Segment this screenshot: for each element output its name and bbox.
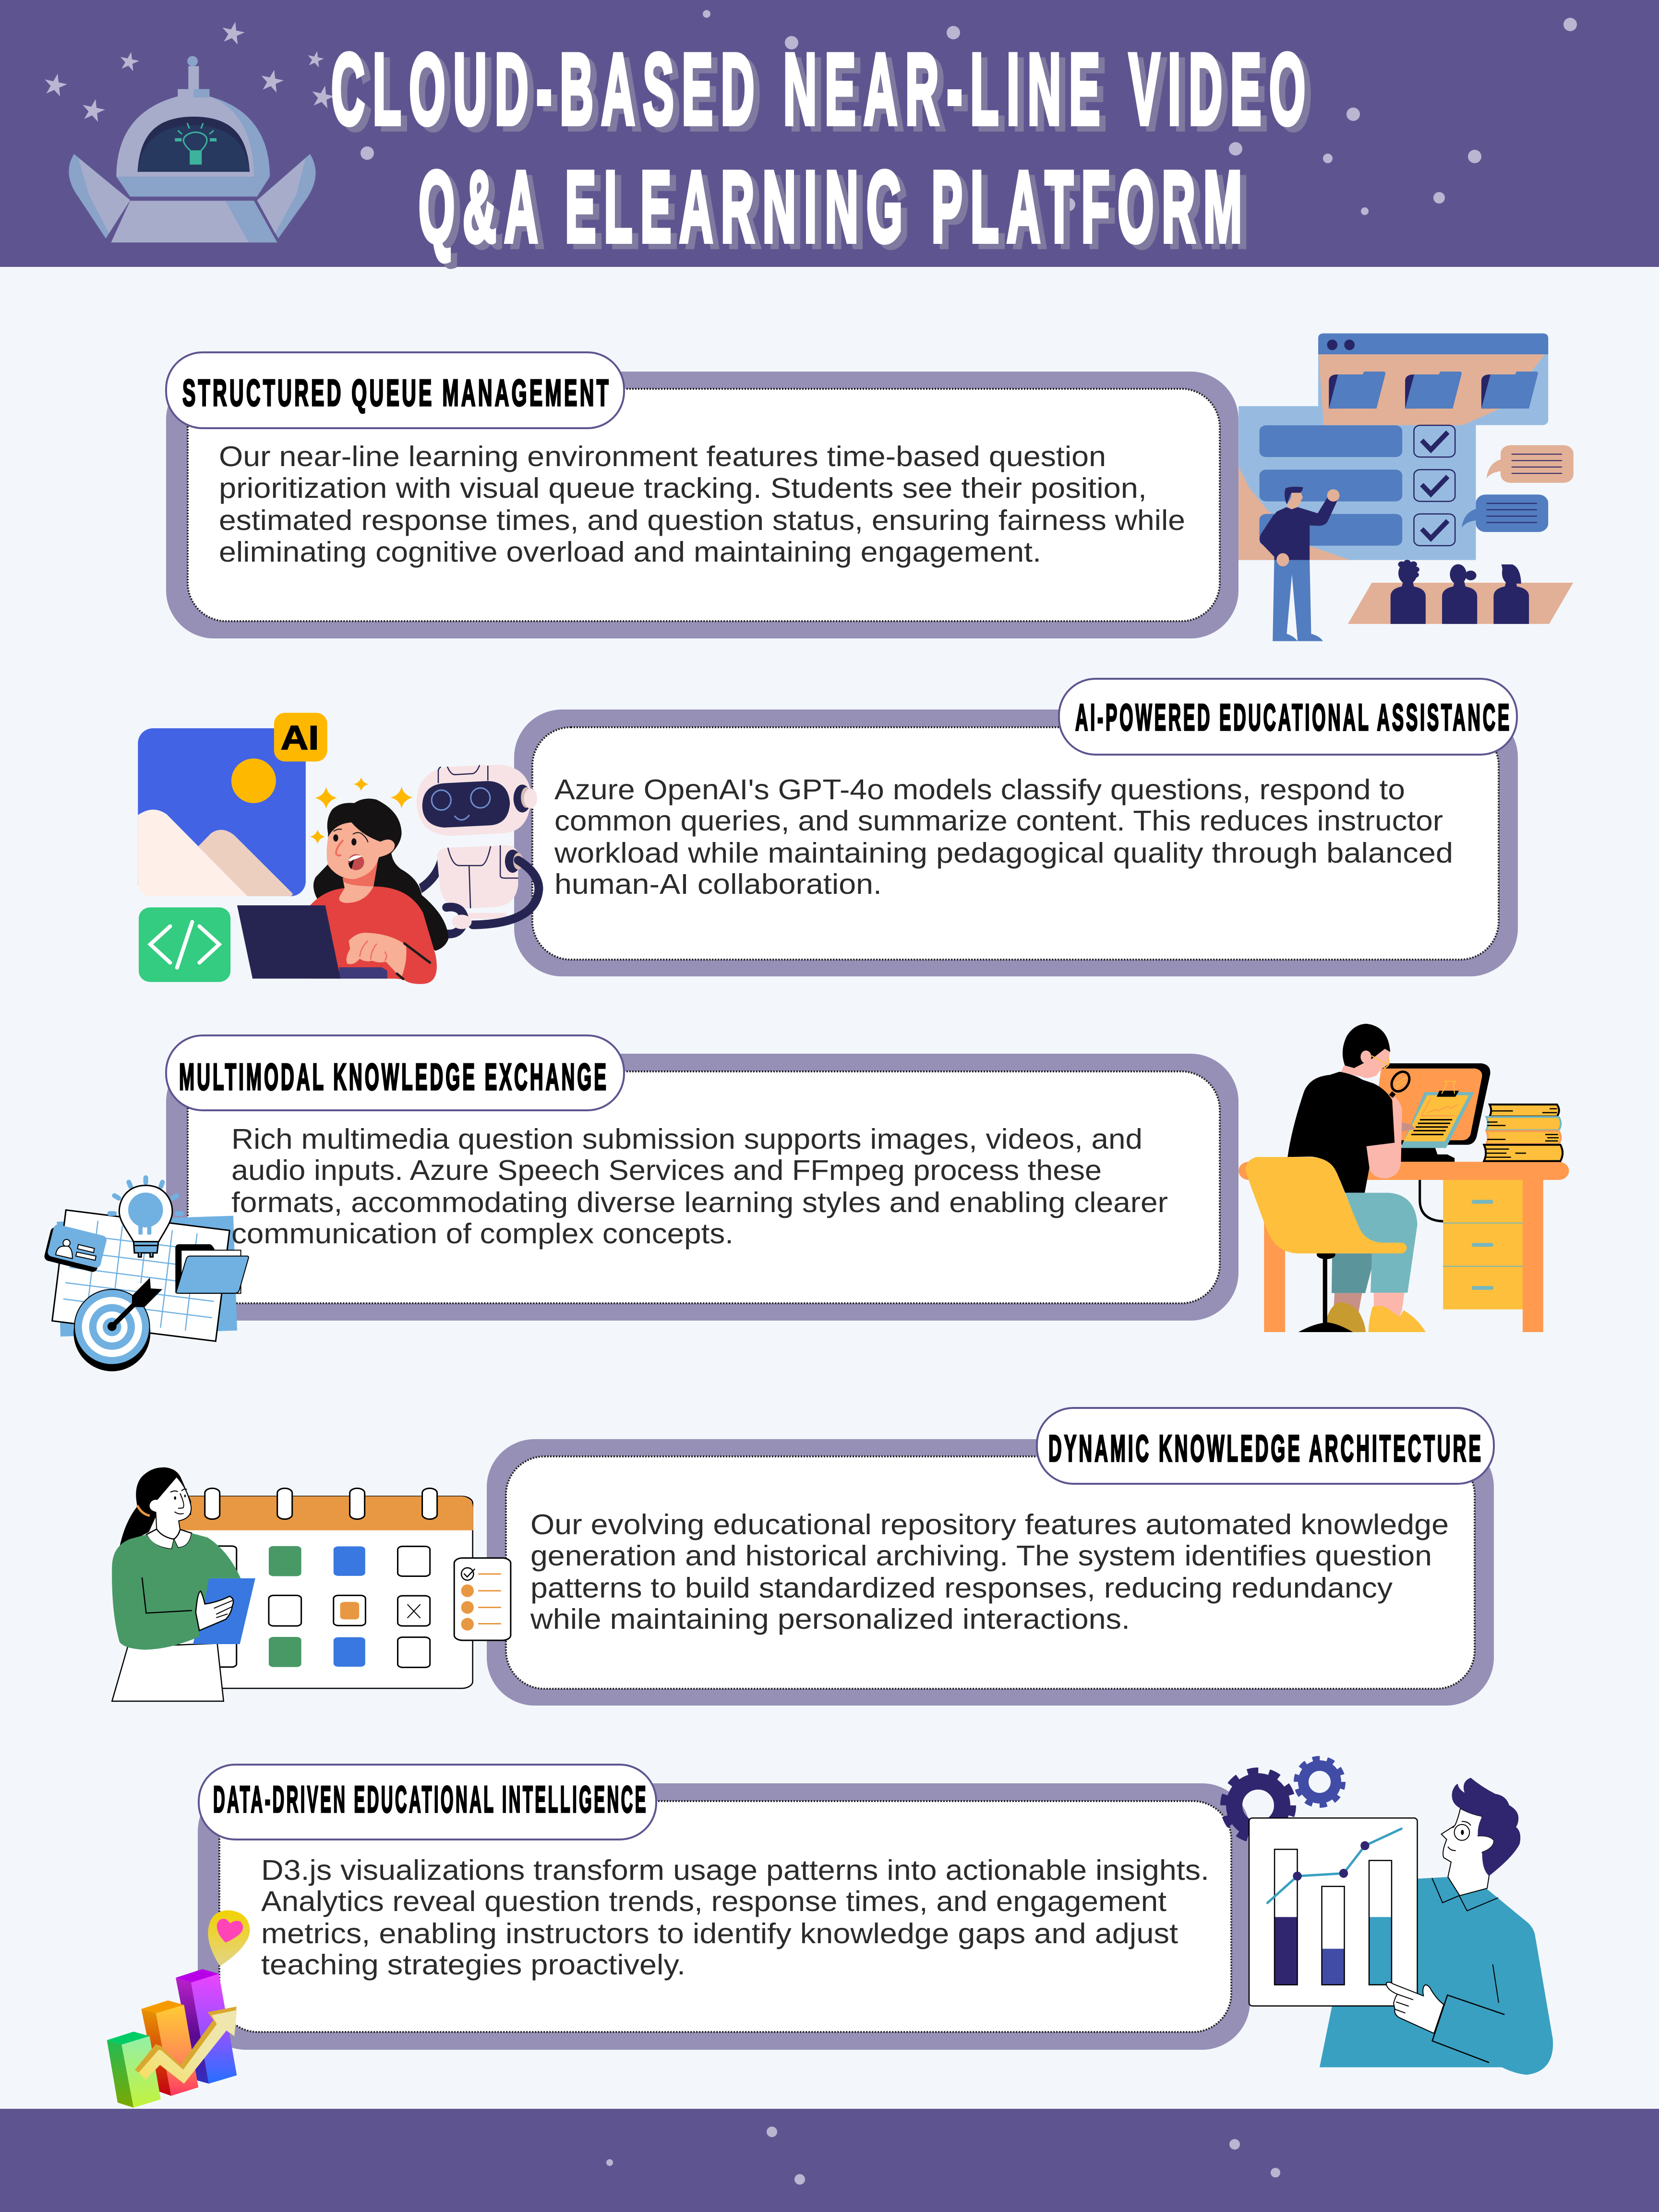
panel: dynamic knowledge architecture: [487, 1408, 1494, 1706]
checklist card: [454, 1558, 511, 1640]
panel frame: [166, 1054, 1238, 1321]
purple bar: [176, 1969, 237, 2084]
body text: multimodal knowledge exchange: audio inputs. Azure Speech Services and FFmpeg process these: [231, 1154, 1102, 1186]
body text: workload while maintaining pedagogical quality through balanced: [554, 837, 1453, 869]
heading pill: [199, 1765, 656, 1839]
footer band: [0, 2109, 1659, 2212]
body text: [219, 441, 1185, 568]
illustration: person working at desk: [1238, 1024, 1569, 1332]
panel frame: [514, 709, 1518, 976]
bulb in window: [176, 123, 216, 164]
woman: [112, 1467, 255, 1701]
code tile: [139, 907, 230, 982]
analyst and board: [1249, 1778, 1553, 2075]
body text: multimodal knowledge exchange: formats, accommodating diverse learning styles and enabling clearer: [231, 1187, 1168, 1218]
header band: [0, 0, 1659, 267]
hand and sleeve: [1386, 1982, 1504, 2063]
checklist rows: [1260, 425, 1402, 546]
sparkles: [310, 777, 413, 844]
panel inner card: [188, 389, 1220, 621]
body text: eliminating cognitive overload and maintaining engagement.: [219, 536, 1041, 568]
panel: AI-powered educational assistance: [514, 679, 1518, 976]
body text: Our near-line learning environment features time-based question: [219, 441, 1106, 472]
body text: prioritization with visual queue tracking. Students see their position,: [219, 472, 1147, 504]
panel: data-driven educational intelligence: [198, 1765, 1250, 2050]
body text: common queries, and summarize content. This reduces instructor: [554, 805, 1443, 837]
panel: multimodal knowledge exchange: [166, 1035, 1238, 1321]
magnifier: [1388, 1069, 1413, 1096]
panel: structured queue management: [166, 352, 1238, 638]
illustration: woman with laptop and robot helper: [138, 713, 539, 984]
panel inner card: [188, 1071, 1220, 1303]
body text: patterns to build standardized responses, reducing redundancy: [530, 1572, 1393, 1604]
body text: [530, 1509, 1449, 1635]
illustration: planning board with bulb, target and folder: [43, 1178, 249, 1371]
desk: [1238, 1162, 1569, 1332]
body text: Our evolving educational repository features automated knowledge: [530, 1509, 1449, 1540]
robot: [417, 765, 539, 934]
panel frame: [166, 372, 1238, 638]
audience: [1348, 560, 1573, 624]
image tile: [138, 728, 306, 896]
body text: multimodal knowledge exchange: communication of complex concepts.: [231, 1218, 733, 1250]
presenter: [1260, 487, 1340, 641]
body text: [261, 1854, 1209, 1981]
body text: multimodal knowledge exchange: Rich multimedia question submission supports images, videos, and: [231, 1123, 1142, 1155]
heading pill: [166, 1035, 624, 1110]
panel inner card: [506, 1456, 1475, 1689]
heading pill: [1037, 1408, 1494, 1484]
header dots: [361, 10, 1577, 215]
icon: gears: [1225, 1759, 1343, 1839]
folder: [175, 1244, 249, 1293]
footer dots: [606, 2127, 1280, 2185]
body text: while maintaining personalized interactions.: [530, 1603, 1130, 1635]
orange bar: [141, 2000, 198, 2096]
panel inner card: [219, 1801, 1231, 2032]
body text: Azure OpenAI's GPT-4o models classify questions, respond to: [554, 774, 1405, 805]
monitor: [1371, 1063, 1490, 1162]
calendar: [179, 1488, 473, 1688]
folders: [1329, 372, 1538, 409]
body text: Analytics reveal question trends, response times, and engagement: [261, 1886, 1166, 1917]
body text: metrics, enabling instructors to identify knowledge gaps and adjust: [261, 1918, 1178, 1949]
title: [331, 33, 1313, 263]
body text: estimated response times, and question status, ensuring fairness while: [219, 505, 1185, 536]
AI badge: AI: [281, 719, 319, 757]
heading pill: [166, 352, 624, 428]
heart pin: [208, 1910, 250, 1966]
grid lines: [63, 1221, 214, 1331]
heading pill: STRUCTURED QUEUE MANAGEMENT: [182, 372, 611, 414]
illustration: woman with calendar and checklist: [112, 1467, 511, 1701]
green bar: [107, 2032, 161, 2108]
panel: data-driven educational intelligence: DATA-DRIVEN EDUCATIONAL INTELLIGENCE: [213, 1778, 648, 1820]
calendar cells: [205, 1546, 430, 1668]
bulb: [109, 1178, 181, 1257]
illustration: analyst with bar chart board and gears: [1225, 1759, 1553, 2075]
body text: generation and historical archiving. The system identifies question: [530, 1540, 1432, 1572]
body text: multimodal knowledge exchange: [231, 1123, 1168, 1250]
heading pill: MULTIMODAL KNOWLEDGE EXCHANGE: [179, 1056, 609, 1098]
body text: teaching strategies proactively.: [261, 1949, 685, 1981]
chart board: [1249, 1818, 1418, 2006]
woman: [237, 799, 448, 984]
body text: D3.js visualizations transform usage patterns into actionable insights.: [261, 1854, 1209, 1886]
AI badge: [274, 713, 327, 761]
ID card: [43, 1224, 108, 1273]
body text: [554, 774, 1453, 900]
illustration: 3D bar chart with arrow and heart pin: [107, 1910, 250, 2108]
laptop: [339, 967, 387, 979]
header stars: [42, 20, 336, 123]
rising arrow: [135, 2007, 237, 2084]
panel frame: [487, 1439, 1494, 1706]
person: [1287, 1024, 1426, 1332]
speech bubbles: [1462, 445, 1574, 532]
body text: human-AI collaboration.: [554, 868, 882, 900]
heading pill: [1059, 679, 1517, 755]
icon: rocket robot with light bulb window: [69, 56, 316, 242]
target: [73, 1278, 162, 1371]
illustration: presenter with checklist and folders: [1238, 334, 1574, 641]
chair: [1246, 1157, 1407, 1332]
panel frame: [198, 1783, 1250, 2050]
books: [1484, 1105, 1563, 1161]
panel inner card: [532, 727, 1499, 960]
